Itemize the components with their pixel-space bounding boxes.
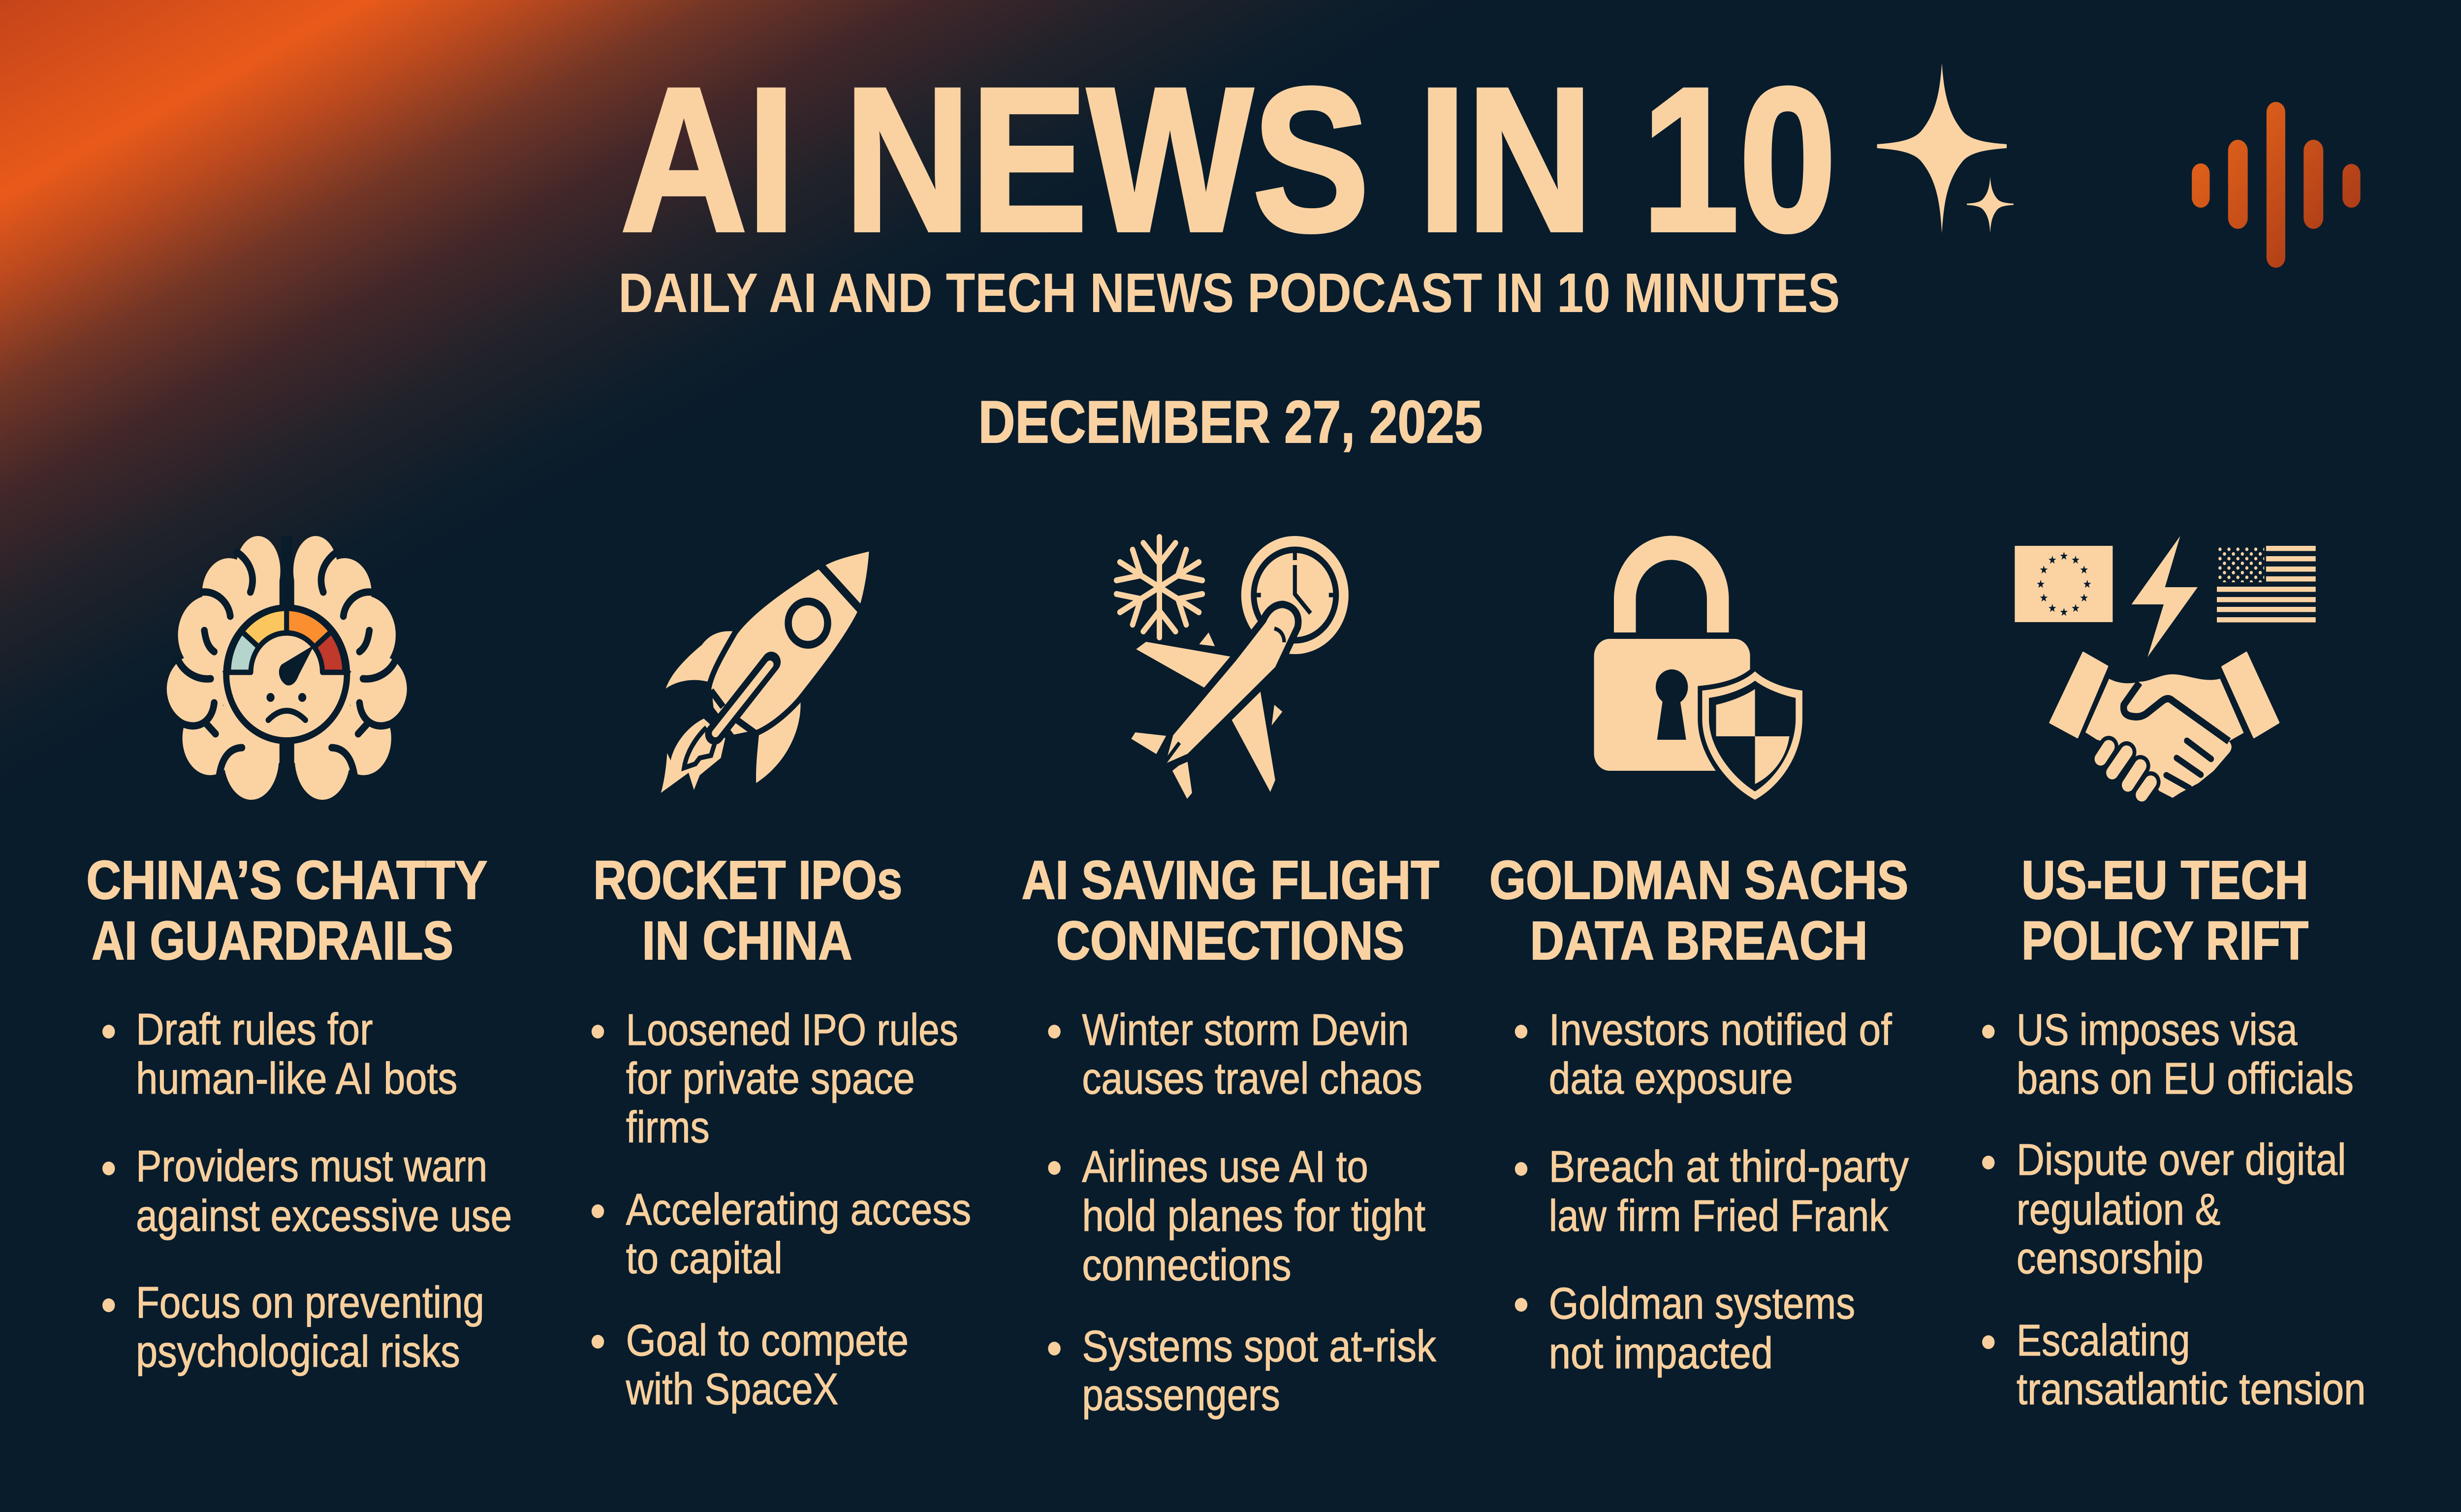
bullet list <box>592 1005 971 1414</box>
bullet list: transatlantic tension <box>2017 1364 2366 1414</box>
bullet list: human-like AI bots <box>136 1054 457 1103</box>
heading: DATA BREACH <box>1530 911 1868 971</box>
bullet list: regulation & <box>2017 1185 2220 1234</box>
icon: padlock and shield <box>1594 548 1802 800</box>
bullet list: Accelerating access <box>626 1185 971 1234</box>
bullet list: bans on EU officials <box>2017 1054 2354 1103</box>
bullet list: psychological risks <box>136 1327 460 1377</box>
bullet list: Dispute over digital <box>2017 1135 2346 1185</box>
heading <box>86 850 487 971</box>
bullet list: passengers <box>1082 1370 1280 1420</box>
bullet list: with SpaceX <box>626 1364 838 1414</box>
bullet list <box>1048 1005 1437 1420</box>
icon: audio waveform <box>2192 102 2361 268</box>
date: DECEMBER 27, 2025 <box>978 388 1483 455</box>
icon: handshake <box>2050 653 2278 798</box>
heading: ROCKET IPOs <box>593 850 902 911</box>
heading: AI GUARDRAILS <box>92 911 453 971</box>
bullet list: Draft rules for <box>136 1005 373 1054</box>
bullet list: Focus on preventing <box>136 1278 484 1327</box>
heading: AI SAVING FLIGHT <box>1022 850 1439 911</box>
subtitle: DAILY AI AND TECH NEWS PODCAST IN 10 MINUTES <box>618 261 1840 324</box>
heading <box>593 850 902 971</box>
bullet list: Providers must warn <box>136 1141 487 1191</box>
heading <box>2021 850 2308 971</box>
bullet list: Systems spot at-risk <box>1082 1322 1437 1371</box>
bullet list: data exposure <box>1549 1054 1793 1103</box>
bullet list: law firm Fried Frank <box>1549 1191 1889 1241</box>
bullet list <box>1515 1005 1909 1378</box>
bullet list: causes travel chaos <box>1082 1054 1422 1103</box>
icon: EU flag <box>2015 546 2113 622</box>
icon: lightning bolt <box>2131 536 2198 657</box>
bullet list: Goal to compete <box>626 1316 909 1365</box>
heading <box>1022 850 1439 971</box>
icon: snowflake, clock and airplane <box>1112 536 1349 799</box>
bullet list: Escalating <box>2017 1316 2190 1365</box>
bullet list: firms <box>626 1102 710 1152</box>
bullet list: censorship <box>2017 1233 2204 1283</box>
bullet list: for private space <box>626 1054 915 1103</box>
icon: brain with gauge <box>167 536 407 802</box>
heading: CONNECTIONS <box>1056 911 1404 971</box>
heading <box>1489 850 1908 971</box>
heading: POLICY RIFT <box>2021 911 2308 971</box>
bullet list: against excessive use <box>136 1191 512 1241</box>
bullet list: Airlines use AI to <box>1082 1142 1368 1192</box>
bullet list: connections <box>1082 1240 1292 1290</box>
icon: US flag <box>2217 546 2316 622</box>
bullet list <box>102 1005 512 1377</box>
heading: US-EU TECH <box>2021 850 2308 911</box>
icon: sparkle <box>1877 63 2014 233</box>
bullet list <box>1982 1005 2366 1414</box>
bullet list: Winter storm Devin <box>1082 1005 1409 1055</box>
bullet list: Loosened IPO rules <box>626 1005 958 1055</box>
panel: China's chatty AI guardrails <box>86 536 512 1377</box>
bullet list: hold planes for tight <box>1082 1191 1425 1241</box>
panel: AI saving flight connections <box>1022 536 1439 1420</box>
panel: Rocket IPOs in China <box>592 548 971 1414</box>
bullet list: Investors notified of <box>1549 1005 1893 1055</box>
title: AI NEWS IN 10 <box>621 45 1836 274</box>
icon: rocket <box>661 548 872 793</box>
bullet list: Goldman systems <box>1549 1279 1855 1328</box>
heading: GOLDMAN SACHS <box>1489 850 1908 911</box>
bullet list: Breach at third-party <box>1549 1142 1909 1192</box>
heading: CHINA’S CHATTY <box>86 850 487 911</box>
panel: US-EU tech policy rift <box>1982 536 2366 1414</box>
bullet list: not impacted <box>1549 1328 1773 1378</box>
icon: flags, lightning and handshake <box>2015 536 2316 798</box>
panel: Goldman Sachs data breach <box>1489 548 1909 1378</box>
heading: IN CHINA <box>642 911 852 971</box>
bullet list: US imposes visa <box>2017 1005 2298 1055</box>
bullet list: to capital <box>626 1233 783 1283</box>
